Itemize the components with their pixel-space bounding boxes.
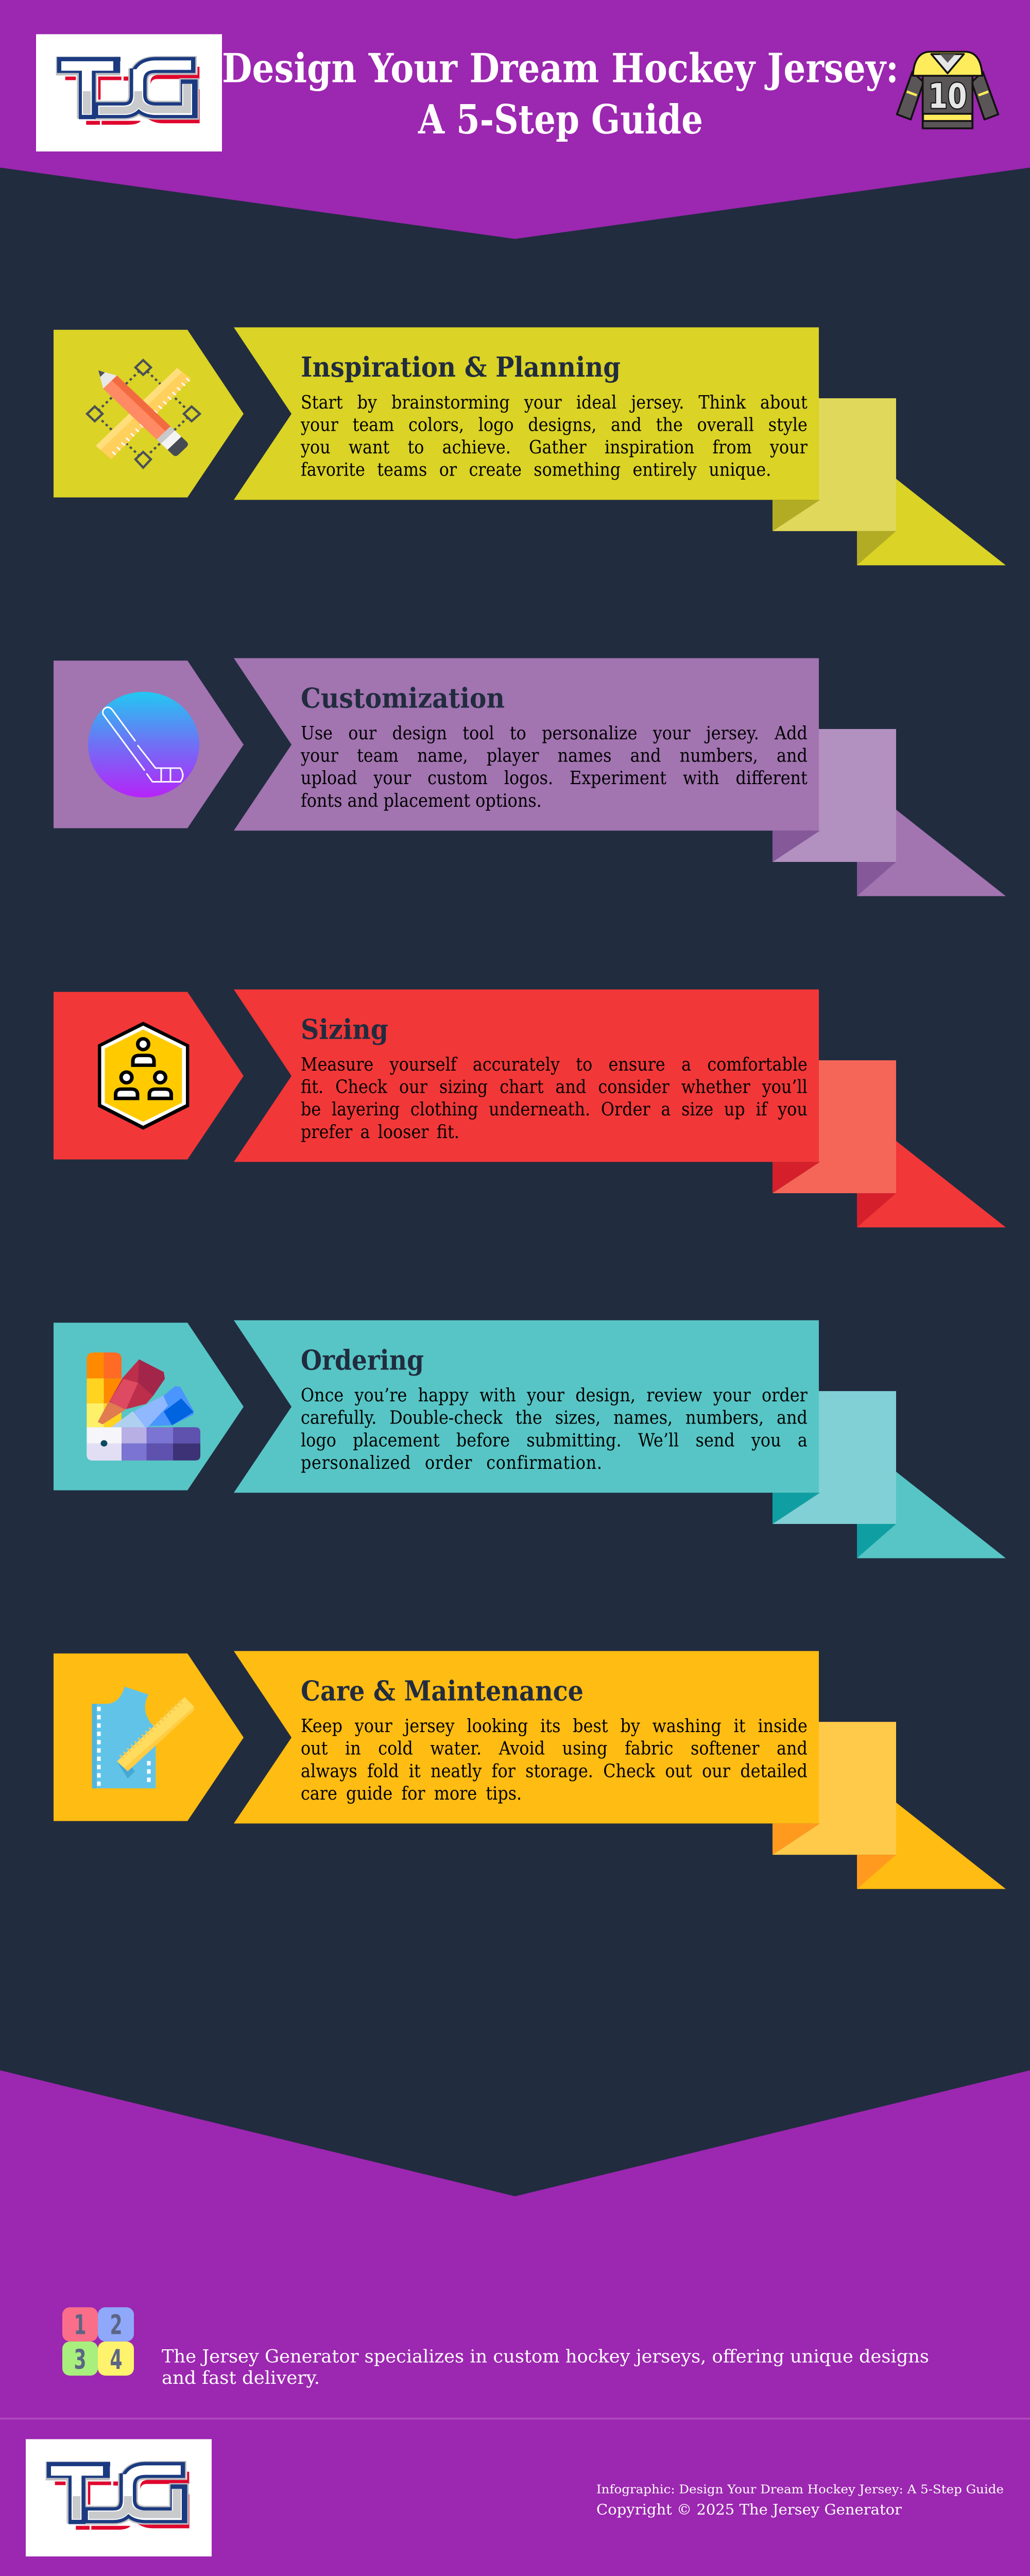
icon tab <box>54 330 244 497</box>
content panel <box>234 1320 819 1493</box>
text block: company description: and fast delivery. <box>162 2368 320 2388</box>
text block: prefer a looser fit. <box>301 1122 459 1142</box>
ribbon folds <box>772 729 1006 896</box>
header banner <box>0 0 1030 239</box>
icon: numbered blocks: 2 <box>110 2309 122 2341</box>
panel: step 2 customization <box>54 658 1006 896</box>
title: Design Your Dream Hockey Jersey: <box>222 44 899 92</box>
content panel <box>234 658 819 831</box>
icon tab <box>54 992 244 1160</box>
text block: out in cold water. Avoid using fabric softener and <box>301 1738 808 1759</box>
text block: you want to achieve. Gather inspiration from your <box>301 437 808 458</box>
title <box>222 44 899 143</box>
heading: Ordering <box>301 1344 424 1376</box>
logo: header <box>36 34 222 151</box>
content panel <box>234 327 819 500</box>
text block: Use our design tool to personalize your jersey. Add <box>301 723 808 743</box>
text block: credits: Copyright © 2025 The Jersey Generator <box>596 2501 902 2518</box>
text block: always fold it neatly for storage. Check out our detailed <box>301 1760 808 1782</box>
text block: personalized order confirmation. <box>301 1452 603 1473</box>
text block: company description: The Jersey Generator specializes in custom hockey jerseys, offering unique designs <box>162 2346 929 2367</box>
panel: step 5 care and maintenance <box>54 1651 1006 1889</box>
text block <box>301 1385 808 1473</box>
icon: hockey stick <box>88 692 199 798</box>
text block <box>301 1054 808 1142</box>
icon: team hexagon <box>98 1022 189 1130</box>
text block: care guide for more tips. <box>301 1783 522 1804</box>
text block: company description <box>162 2346 929 2388</box>
ribbon folds <box>772 1060 1006 1227</box>
text block: Keep your jersey looking its best by washing it inside <box>301 1716 808 1737</box>
content panel <box>234 990 819 1162</box>
icon: numbered blocks: 4 <box>110 2344 122 2375</box>
text block <box>301 1716 808 1804</box>
icon tab <box>54 1323 244 1490</box>
heading: Customization <box>301 682 505 714</box>
text block: fonts and placement options. <box>301 790 542 811</box>
text block: Start by brainstorming your ideal jersey. Think about <box>301 392 808 413</box>
icon tab <box>54 1653 244 1821</box>
icon tab <box>54 660 244 828</box>
text block: favorite teams or create something entirely unique. <box>301 459 771 480</box>
text block: upload your custom logos. Experiment with different <box>301 768 808 789</box>
text block: Measure yourself accurately to ensure a comfortable <box>301 1054 808 1075</box>
text block <box>301 392 808 480</box>
text block <box>301 723 808 811</box>
icon: garment pattern and ruler <box>92 1687 194 1788</box>
content panel <box>234 1651 819 1823</box>
text block: be layering clothing underneath. Order a size up if you <box>301 1099 808 1120</box>
text block: credits: Infographic: Design Your Dream Hockey Jersey: A 5-Step Guide <box>596 2482 1004 2497</box>
title: A 5-Step Guide <box>418 96 703 143</box>
heading: Inspiration & Planning <box>301 351 621 383</box>
panel: step 3 sizing <box>54 989 1006 1227</box>
text block: credits <box>596 2482 1004 2518</box>
panel: step 1 inspiration and planning <box>54 327 1006 566</box>
text block: carefully. Double-check the sizes, names, numbers, and <box>301 1407 808 1428</box>
icon: numbered blocks: 3 <box>74 2344 86 2375</box>
icon: colour swatches <box>87 1352 200 1461</box>
text block: fit. Check our sizing chart and consider whether you’ll <box>301 1076 808 1097</box>
icon: pencil and ruler <box>87 360 200 468</box>
heading: Care & Maintenance <box>301 1675 583 1707</box>
ribbon folds <box>772 1722 1006 1889</box>
icon: hockey jersey: 10 <box>928 77 967 116</box>
logo: footer <box>26 2439 212 2556</box>
ribbon folds <box>772 398 1006 565</box>
icon: hockey jersey <box>897 52 998 128</box>
footer section <box>0 2070 1030 2576</box>
panel: step 4 ordering <box>54 1320 1006 1558</box>
text block: your team name, player names and numbers, and <box>301 745 808 766</box>
ribbon folds <box>772 1391 1006 1558</box>
heading: Sizing <box>301 1013 388 1045</box>
icon: numbered blocks <box>62 2307 134 2376</box>
text block: your team colors, logo designs, and the overall style <box>301 414 808 435</box>
text block: Once you’re happy with your design, review your order <box>301 1385 808 1406</box>
text block: logo placement before submitting. We’ll send you a <box>301 1430 808 1451</box>
icon: numbered blocks: 1 <box>74 2309 86 2341</box>
